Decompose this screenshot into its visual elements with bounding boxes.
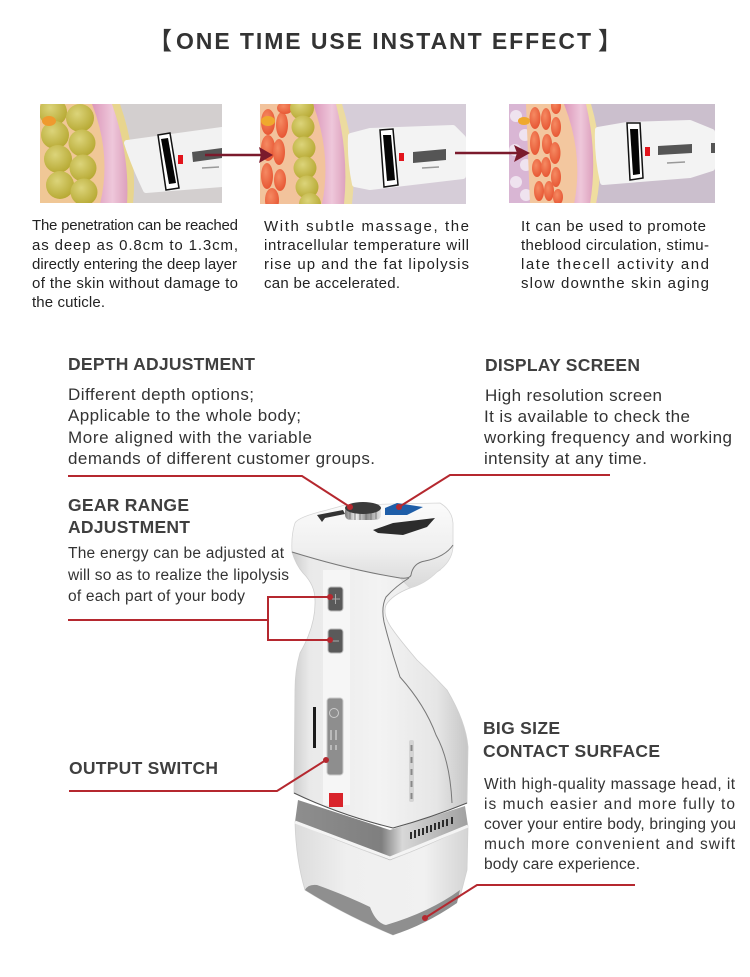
text: step 3 description	[521, 218, 709, 292]
panel: display screen: It is available to check the	[484, 407, 690, 426]
device plus button	[328, 587, 343, 611]
panel: big size contact surface: CONTACT SURFACE	[483, 741, 660, 761]
device switch panel	[327, 698, 343, 775]
text: step 1 description: of the skin without damage to	[32, 275, 238, 292]
leader line: depth adjustment	[68, 476, 353, 510]
panel: display screen: High resolution screen	[485, 386, 662, 405]
panel: gear range adjustment: will so as to realize the lipolysis	[67, 567, 289, 584]
leader line: gear range buttons	[68, 594, 333, 643]
text: step 2 description: can be accelerated.	[264, 275, 400, 292]
panel: display screen: working frequency and working	[483, 428, 732, 447]
panel: gear range adjustment: of each part of your body	[68, 588, 245, 605]
device cap	[292, 503, 453, 588]
panel: big size contact surface: With high-quality massage head, it	[484, 776, 736, 793]
title: ONE TIME USE INSTANT EFFECT	[176, 28, 591, 54]
device minus button	[328, 629, 343, 653]
device dark window	[373, 518, 435, 535]
device metal band	[295, 800, 468, 860]
panel: depth adjustment	[68, 354, 375, 468]
text: step 2 description: intracellular temperature will	[264, 237, 469, 254]
arrow: step 2 to step 3	[455, 145, 530, 162]
panel: depth adjustment: DEPTH ADJUSTMENT	[68, 354, 255, 374]
panel: depth adjustment: Applicable to the whole body;	[68, 406, 301, 425]
leader line: display screen	[396, 475, 610, 510]
device: handheld body-slimming handpiece	[292, 502, 468, 935]
heading: output switch: OUTPUT SWITCH	[69, 758, 218, 778]
panel: depth adjustment: Different depth options;	[68, 385, 254, 404]
device side slot	[313, 707, 316, 748]
leader line: output switch	[69, 757, 329, 791]
panel: display screen: DISPLAY SCREEN	[485, 355, 640, 375]
text: step 1 description	[32, 217, 238, 311]
image: fat layer treatment step 1	[39, 98, 222, 206]
panel: gear range adjustment: GEAR RANGE	[68, 495, 189, 515]
text: step 3 description: theblood circulation, stimu-	[521, 237, 709, 254]
text: step 1 description: The penetration can be reached	[32, 217, 238, 234]
image: fat layer treatment step 2	[260, 104, 466, 204]
text: step 2 description	[264, 218, 469, 292]
text: step 1 description: directly entering the deep layer	[32, 256, 237, 273]
device side indicator lights	[409, 740, 414, 802]
device red label	[329, 793, 343, 807]
title: 【	[148, 28, 172, 55]
panel: big size contact surface: body care experience.	[484, 856, 640, 873]
text: step 2 description: With subtle massage, the	[264, 218, 469, 235]
panel: big size contact surface: much more convenient and swift	[484, 836, 736, 853]
text: step 1 description: the cuticle.	[32, 294, 105, 311]
leader line: contact surface	[422, 885, 635, 921]
image: fat layer treatment step 3	[509, 98, 715, 205]
device lower head	[295, 822, 468, 935]
device vents	[411, 817, 452, 839]
text: step 1 description: as deep as 0.8cm to 1.3cm,	[32, 237, 238, 254]
panel: gear range adjustment	[67, 495, 289, 605]
device side panel	[323, 570, 350, 805]
device body	[292, 540, 468, 828]
panel: big size contact surface: BIG SIZE	[483, 718, 560, 738]
panel: display screen	[483, 355, 732, 468]
title: 】	[598, 28, 622, 55]
panel: gear range adjustment: ADJUSTMENT	[68, 517, 190, 537]
device left top slot	[317, 510, 345, 522]
text: step 2 description: rise up and the fat lipolysis	[264, 256, 469, 273]
device depth knob	[345, 502, 381, 520]
panel: display screen: intensity at any time.	[484, 449, 647, 468]
panel: big size contact surface: cover your entire body, bringing you	[484, 816, 736, 833]
device display screen	[385, 503, 423, 515]
device foot	[305, 885, 460, 935]
panel: big size contact surface: is much easier and more fully to	[484, 796, 735, 813]
text: step 3 description: slow downthe skin aging	[521, 275, 709, 292]
text: step 3 description: It can be used to promote	[521, 218, 706, 235]
panel: gear range adjustment: The energy can be adjusted at	[68, 545, 285, 562]
arrow: step 1 to step 2	[205, 147, 273, 163]
text: step 3 description: late thecell activity and	[521, 256, 709, 273]
panel: big size contact surface	[483, 718, 736, 873]
panel: depth adjustment: More aligned with the variable	[68, 428, 312, 447]
panel: depth adjustment: demands of different customer groups.	[68, 449, 375, 468]
